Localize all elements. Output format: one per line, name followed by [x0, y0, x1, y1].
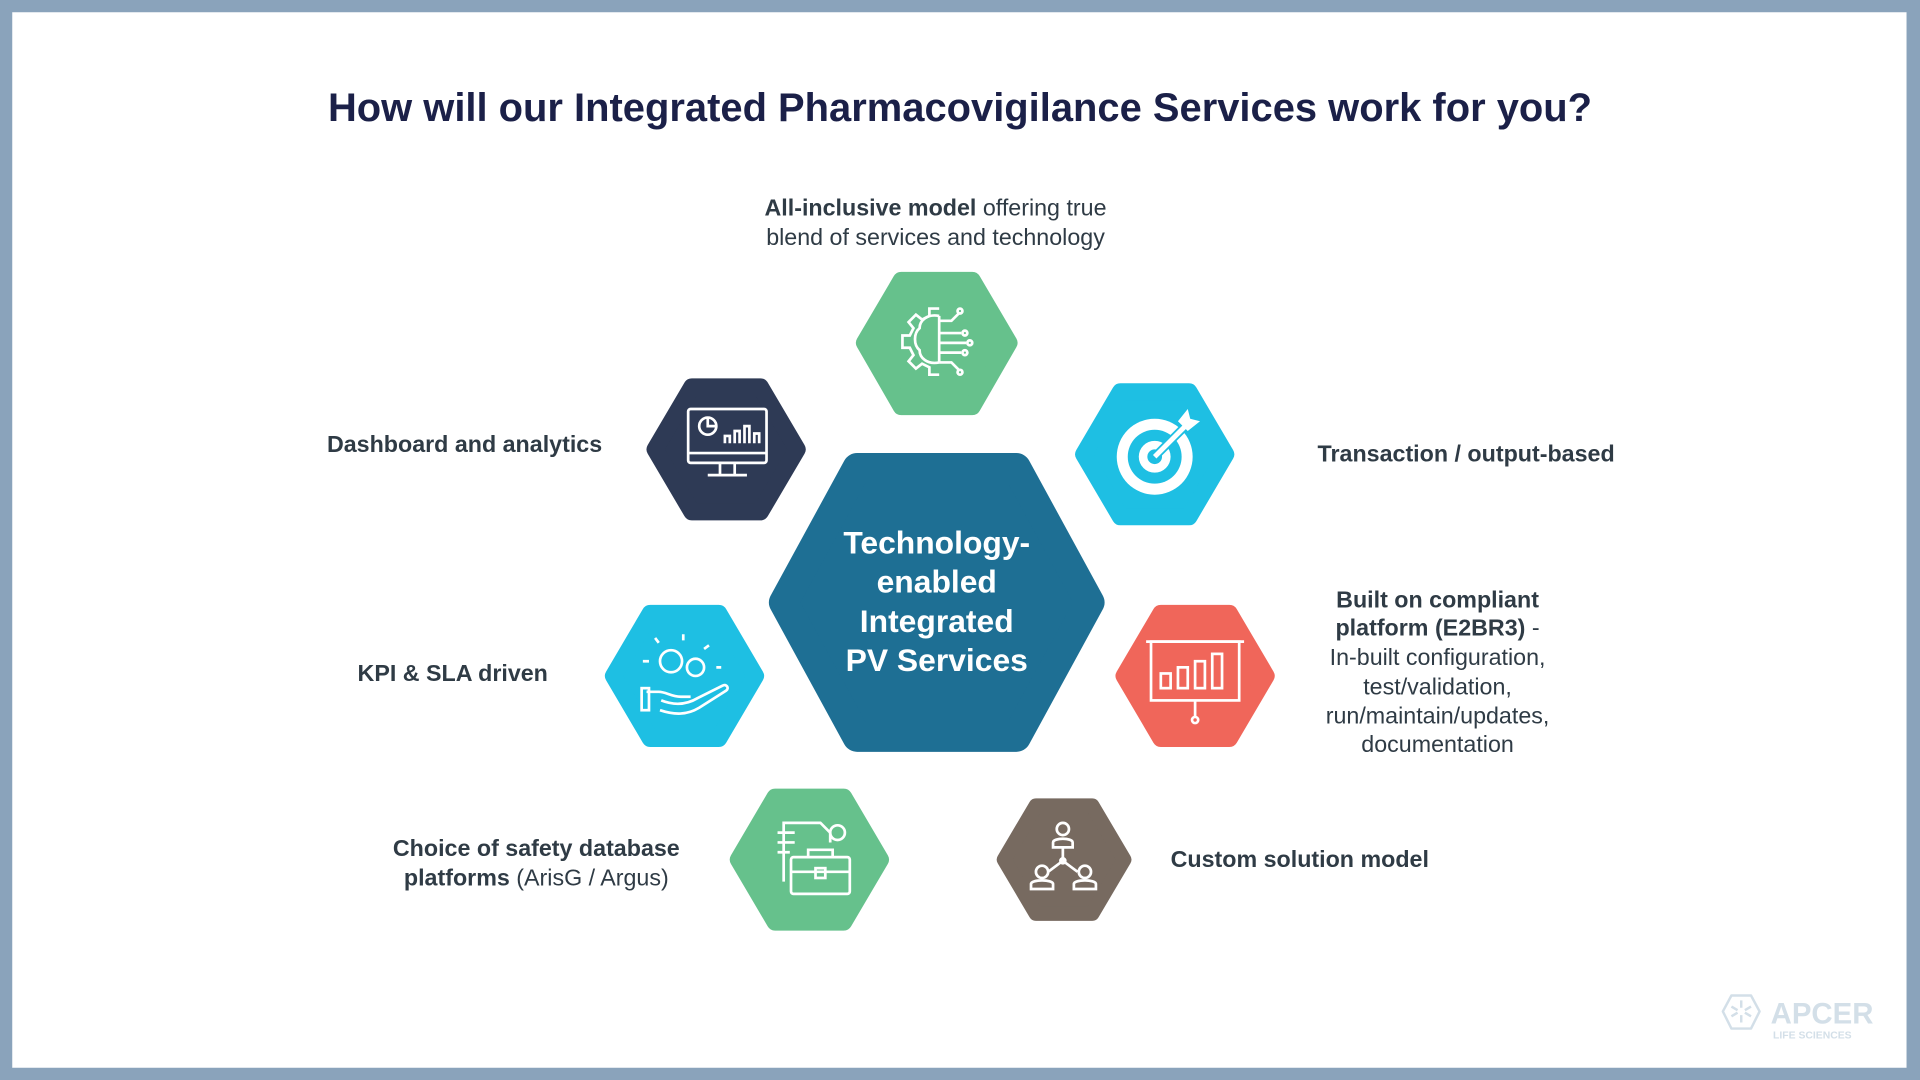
center hexagon: enabled	[877, 564, 997, 600]
icon: target	[1117, 409, 1200, 495]
text: transaction: Transaction / output-based	[1318, 441, 1615, 467]
icon: people network	[1031, 823, 1096, 889]
hex: custom solution (brown)	[1004, 806, 1124, 913]
text: compliant platform: In-built configuration,	[1330, 644, 1545, 670]
center hexagon: Technology-	[843, 524, 1030, 560]
hex: safety database (green bottom)	[738, 797, 880, 922]
hex: transaction (cyan target)	[1084, 392, 1226, 517]
center hexagon	[784, 468, 1090, 737]
text: compliant platform: platform (E2BR3) -	[1335, 615, 1540, 641]
icon: presentation board	[1146, 642, 1244, 723]
logo	[1723, 996, 1873, 1041]
icon: hand with gears	[642, 634, 728, 714]
icon: monitor	[688, 409, 767, 475]
hex: compliant platform (red)	[1124, 613, 1266, 738]
logo: APCER	[1771, 998, 1873, 1031]
hex: all-inclusive model (green top)	[864, 280, 1009, 407]
text: KPI: KPI & SLA driven	[358, 660, 548, 686]
text: compliant platform: run/maintain/updates,	[1326, 703, 1549, 729]
hex: KPI (cyan)	[613, 613, 756, 738]
icon: brain gear	[902, 309, 972, 375]
title: How will our Integrated Pharmacovigilance Services work for you?	[328, 86, 1592, 130]
text: all-inclusive model: blend of services and technology	[766, 224, 1105, 250]
hex: dashboard (navy)	[655, 387, 797, 512]
logo: LIFE SCIENCES	[1773, 1030, 1852, 1041]
text: safety database: platforms (ArisG / Argus)	[404, 864, 669, 890]
text: compliant platform: documentation	[1361, 731, 1514, 757]
icon: document and briefcase	[778, 823, 850, 894]
text: compliant platform: test/validation,	[1363, 673, 1512, 699]
center hexagon: Integrated	[860, 603, 1014, 639]
center hexagon: PV Services	[846, 642, 1028, 678]
text: custom solution: Custom solution model	[1171, 846, 1429, 872]
text: compliant platform: Built on compliant	[1336, 586, 1539, 612]
text: safety database: Choice of safety database	[393, 835, 680, 861]
text: all-inclusive model: All-inclusive model offering true	[765, 195, 1107, 221]
text: dashboard: Dashboard and analytics	[327, 431, 602, 457]
